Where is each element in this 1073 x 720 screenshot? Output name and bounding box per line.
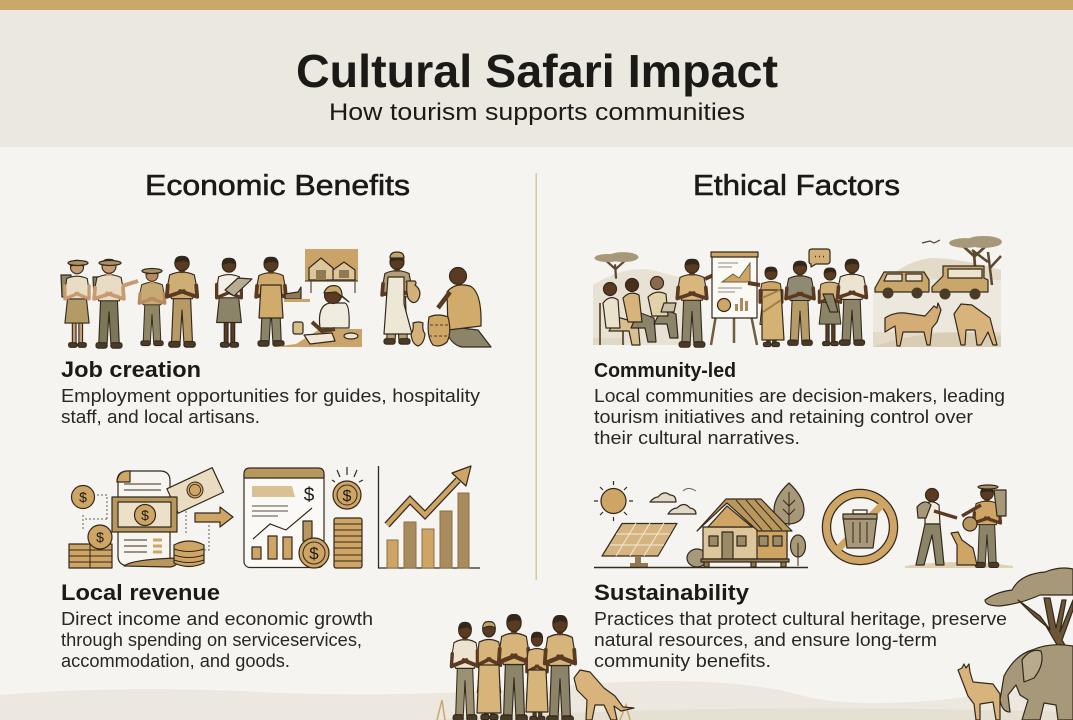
job creation body: Employment opportunities for guides, hospitality [61, 386, 480, 406]
illustration: job creation workers [61, 249, 491, 348]
job creation body: staff, and local artisans. [61, 407, 260, 427]
arrow right [195, 507, 233, 527]
guides group [61, 256, 198, 348]
no litter sign [826, 494, 894, 560]
dashboard window [244, 468, 329, 568]
community-led body: tourism initiatives and retaining control over [594, 407, 973, 427]
text: sustainability [594, 580, 1007, 671]
back banknote [167, 468, 224, 513]
illustration: local revenue [69, 466, 480, 568]
community-led heading: Community-led [594, 359, 736, 382]
coin with rays and stack: $ [343, 488, 352, 505]
house [687, 499, 792, 567]
centre divider [536, 173, 537, 580]
elephant [1000, 645, 1073, 720]
clouds and bird [650, 493, 676, 502]
front banknote: $ [141, 507, 149, 523]
antelope [885, 303, 941, 346]
hospitality staff [216, 257, 287, 347]
community-led body: their cultural narratives. [594, 428, 800, 448]
growth bar chart [378, 466, 480, 568]
illustration: sustainability [594, 481, 1013, 568]
sustainability body: natural resources, and ensure long-term [594, 630, 937, 650]
sustainability body: Practices that protect cultural heritage, preserve [594, 609, 1007, 629]
text: community-led [594, 359, 1005, 448]
large acacia tree [985, 568, 1073, 650]
ground line [594, 566, 808, 568]
sustainability heading: Sustainability [594, 580, 750, 605]
coin with rays and stack [332, 467, 363, 568]
illustration: community-led meeting [593, 236, 1002, 347]
local revenue body: Direct income and economic growth [61, 609, 373, 629]
top accent bar [0, 0, 1073, 10]
three standing leaders [785, 259, 867, 346]
text: job creation [61, 357, 480, 427]
safari vehicles [875, 266, 988, 300]
lioness [954, 304, 997, 345]
heading: Ethical Factors: Ethical Factors [693, 170, 900, 202]
solar panel [602, 523, 677, 567]
seated villagers [600, 276, 678, 345]
sustainability body: community benefits. [594, 651, 771, 671]
presenter [676, 259, 708, 347]
job creation heading: Job creation [61, 357, 201, 382]
volunteers and dog [905, 485, 1013, 568]
coins and stacks [69, 486, 209, 568]
sun [594, 481, 633, 521]
trees [774, 483, 806, 566]
bottom hills [0, 680, 1073, 720]
coins and stacks: $ [79, 489, 87, 505]
local revenue body: through spending on serviceservices, [61, 630, 362, 650]
bottom community family [437, 615, 630, 720]
potter standing [381, 252, 420, 344]
title: Cultural Safari Impact [296, 45, 778, 97]
receipt [117, 471, 180, 567]
local revenue body: accommodation, and goods. [61, 651, 290, 671]
artisan at desk [273, 286, 362, 347]
carving on shelf [285, 287, 301, 299]
bottom antelope [958, 664, 1000, 720]
dashboard window: $ [304, 485, 315, 506]
dashboard window: $ [309, 544, 319, 563]
bottom lioness [574, 670, 634, 720]
seated potter [411, 268, 491, 347]
local revenue heading: Local revenue [61, 580, 220, 605]
text: local revenue [61, 580, 373, 671]
flipchart [711, 252, 758, 345]
elephant ear [1022, 650, 1042, 682]
left landscape [593, 252, 700, 345]
coins and stacks: $ [96, 529, 104, 545]
header band [0, 10, 1073, 147]
right landscape [873, 236, 1002, 347]
lodge sign [305, 249, 358, 293]
heading: Economic Benefits: Economic Benefits [145, 170, 410, 202]
woman in wrap [748, 267, 784, 347]
speech bubble [809, 249, 830, 267]
front banknote [112, 497, 177, 532]
community-led body: Local communities are decision-makers, leading [594, 386, 1005, 406]
subtitle: How tourism supports communities [329, 99, 745, 126]
